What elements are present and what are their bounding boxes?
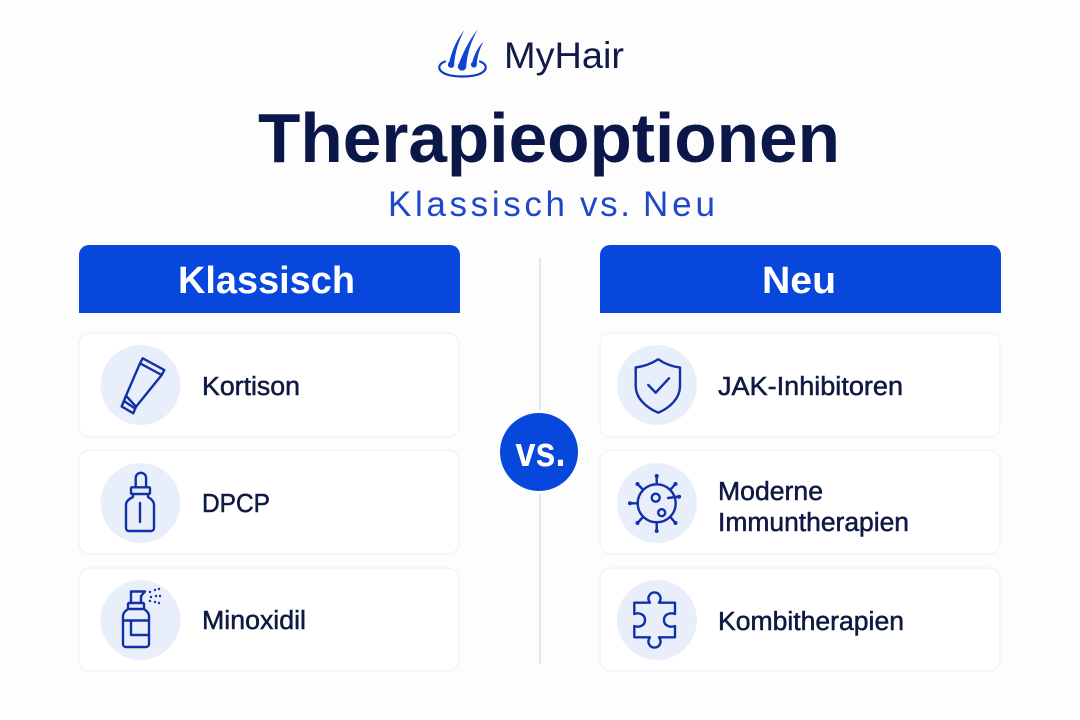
heading: Neu: Neu [762,260,836,302]
title: Therapieoptionen [258,99,840,177]
icon: hair follicles [439,29,486,76]
icon: tube [122,358,164,413]
icon: puzzle piece [634,592,675,648]
icon: virus cell [628,474,681,533]
card: Moderne Immuntherapien [600,450,1000,554]
subtitle: vs. [580,185,630,224]
panel: Neu [600,245,1001,671]
center divider line [539,258,541,664]
card: DPCP: DPCP [202,490,270,518]
card: Minoxidil: Minoxidil [202,607,306,635]
card: Kortison: Kortison [202,373,300,401]
icon: dropper bottle [126,473,154,531]
card: Moderne Immuntherapien: Moderne [718,478,823,506]
card: Minoxidil [79,568,459,671]
card: Kombitherapien: Kombitherapien [718,608,904,636]
card: DPCP [79,450,459,554]
subtitle: Klassisch [388,185,565,224]
icon: spray bottle [123,588,161,647]
icon: shield with check [636,359,680,413]
vs. badge: vs. [516,428,566,475]
card: JAK-Inhibitoren: JAK-Inhibitoren [718,373,903,401]
logo wordmark: MyHair [504,35,624,76]
card: JAK-Inhibitoren [600,333,1000,437]
subtitle [388,185,715,224]
card: Kombitherapien [600,568,1000,671]
heading: Neu [600,245,1001,313]
panel: Klassisch [79,245,460,671]
heading: Klassisch: Klassisch [178,260,355,302]
heading: Klassisch [79,245,460,313]
card: Kortison [79,333,459,437]
vs. badge [497,410,581,494]
card: Moderne Immuntherapien: Immuntherapien [718,509,909,537]
subtitle: Neu [643,185,715,224]
logo: MyHair [439,29,624,76]
